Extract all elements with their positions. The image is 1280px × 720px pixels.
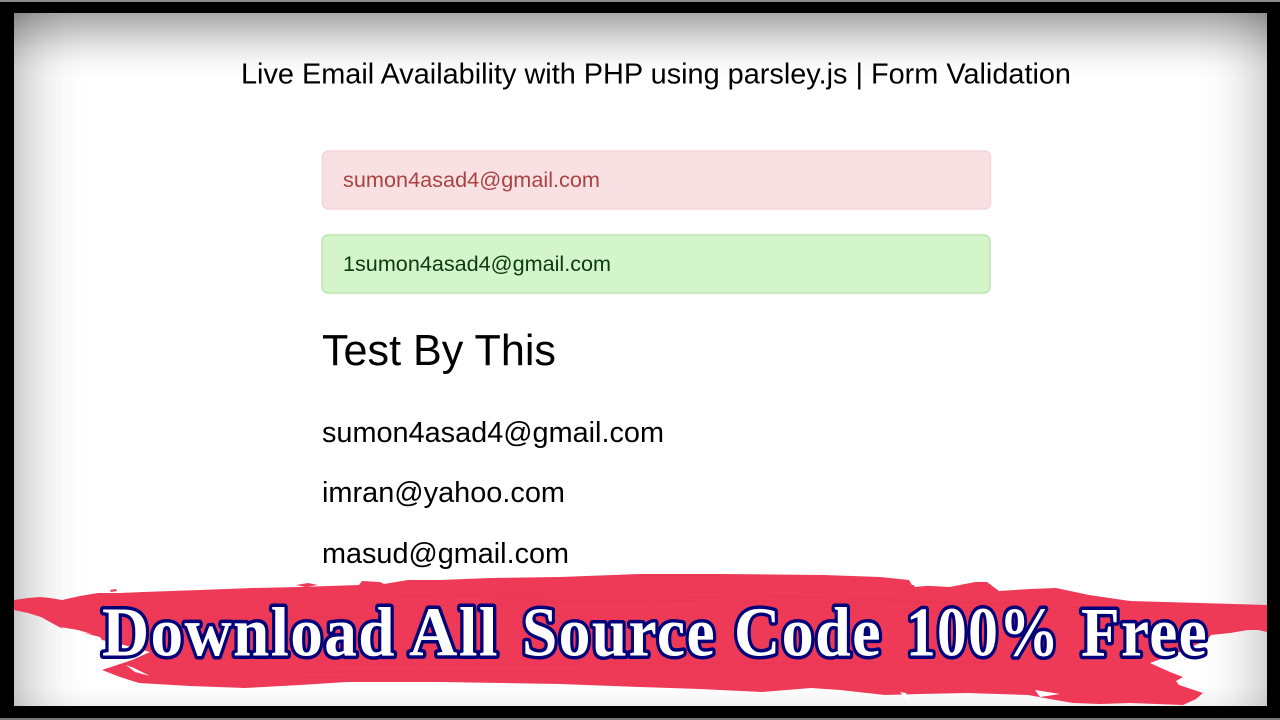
banner text: download all source code: All	[409, 594, 499, 672]
input: available email (green): 1sumon4asad4@gmail.com	[343, 252, 611, 276]
email list: imran@yahoo.com	[322, 477, 565, 509]
email list: masud@gmail.com	[322, 538, 569, 570]
input: taken email (red)	[322, 151, 990, 209]
input: taken email (red): sumon4asad4@gmail.com	[343, 168, 600, 192]
heading: test by this: Test By This	[322, 326, 556, 375]
red paint brush stroke	[14, 574, 1267, 705]
email list: sumon4asad4@gmail.com	[322, 417, 664, 449]
banner text: download all source code	[102, 594, 1208, 672]
banner text: download all source code: Free	[1081, 594, 1208, 672]
email list	[322, 417, 664, 570]
input: available email (green)	[322, 235, 990, 293]
banner text: download all source code: Download	[102, 594, 396, 672]
banner text: download all source code: 100%	[906, 594, 1060, 672]
banner text: download all source code: Source	[522, 594, 716, 672]
banner text: download all source code: Code	[734, 594, 882, 672]
title: Live Email Availability with PHP using parsley.js | Form Validation	[241, 58, 1071, 90]
